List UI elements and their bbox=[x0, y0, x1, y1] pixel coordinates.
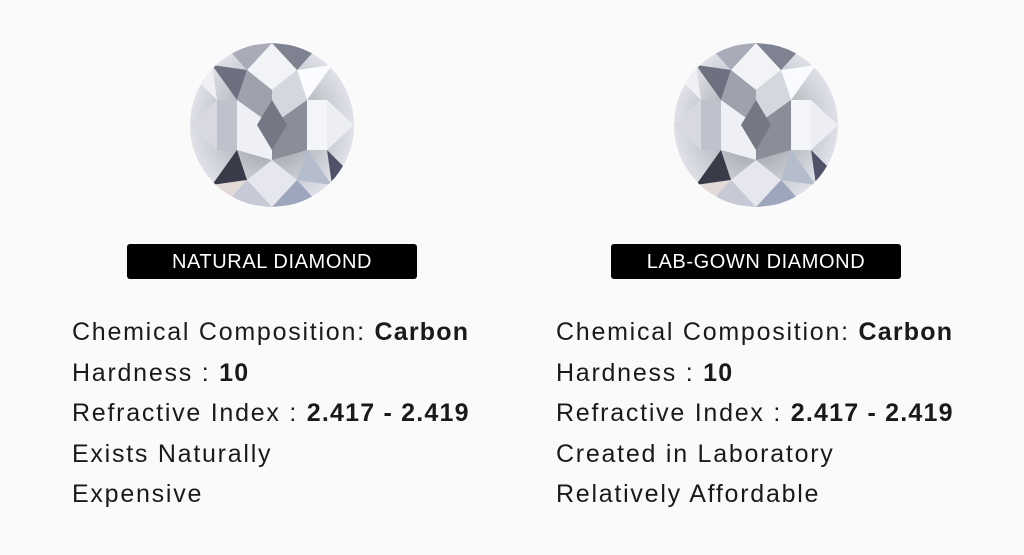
text block: lab-grown diamond properties: Refractive Index : 2.417 - 2.419 bbox=[556, 399, 954, 427]
text block: lab-grown diamond properties: Created in Laboratory bbox=[556, 440, 835, 468]
text block: lab-grown diamond properties: Chemical Composition: Carbon bbox=[556, 318, 953, 346]
label: natural diamond bbox=[127, 244, 417, 279]
icon: natural diamond bbox=[190, 43, 354, 207]
text block: natural diamond properties: Exists Naturally bbox=[72, 440, 272, 468]
label: natural diamond: NATURAL DIAMOND bbox=[172, 251, 372, 273]
icon: lab-grown diamond bbox=[674, 43, 838, 207]
text block: lab-grown diamond properties: Hardness : 10 bbox=[556, 358, 733, 386]
text block: lab-grown diamond properties: Relatively Affordable bbox=[556, 480, 820, 508]
label: lab-grown diamond bbox=[611, 244, 901, 279]
label: lab-grown diamond: LAB-GOWN DIAMOND bbox=[647, 251, 865, 273]
text block: natural diamond properties bbox=[72, 318, 470, 508]
text block: natural diamond properties: Expensive bbox=[72, 480, 203, 508]
text block: lab-grown diamond properties bbox=[556, 318, 954, 508]
text block: natural diamond properties: Chemical Composition: Carbon bbox=[72, 318, 469, 346]
text block: natural diamond properties: Refractive Index : 2.417 - 2.419 bbox=[72, 399, 470, 427]
text block: natural diamond properties: Hardness : 10 bbox=[72, 358, 249, 386]
